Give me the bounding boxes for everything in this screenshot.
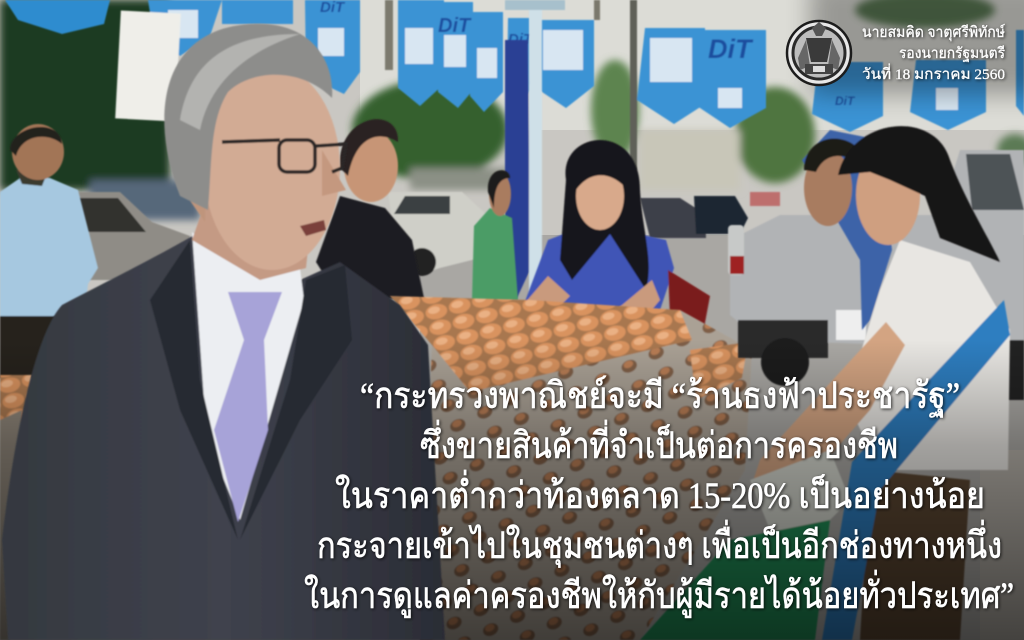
blue standing banner and pole	[505, 0, 565, 300]
white shirt collar	[192, 232, 304, 520]
lapels	[150, 240, 238, 540]
egg trays stack	[0, 296, 752, 640]
background cars	[60, 192, 780, 280]
purple tie	[214, 292, 282, 522]
top-right dim overlay	[810, 0, 1024, 95]
quote text block	[304, 375, 1014, 618]
blue DIT flag banners: DiT	[508, 31, 534, 48]
icon: government emblem seal	[787, 21, 851, 85]
grey hair	[164, 24, 332, 210]
person: background man at left	[0, 124, 98, 378]
person: vendor in blue shirt	[524, 140, 710, 328]
speaker name and date: วันที่ 18 มกราคม 2560	[862, 63, 1005, 83]
person: woman in black jacket	[316, 119, 424, 300]
dark suit	[2, 235, 445, 640]
quote text block: ซึ่งขายสินค้าที่จำเป็นต่อการครองชีพ	[420, 419, 898, 467]
pickup truck	[728, 150, 1024, 400]
person: woman in green	[472, 170, 518, 300]
foreground speaker: Somkid	[2, 24, 445, 640]
blue DIT flag banners: DiT	[438, 15, 472, 37]
dark gradient overlay behind quote	[0, 340, 1024, 640]
speaker name and date: รองนายกรัฐมนตรี	[899, 45, 1005, 62]
speaker name and date: นายสมคิด จาตุศรีพิทักษ์	[862, 24, 1005, 42]
blue DIT flag banners	[5, 0, 1024, 170]
person: vendor in white shirt with blue apron	[640, 126, 1010, 640]
glasses	[222, 140, 346, 172]
neck and face	[192, 200, 310, 280]
blue DIT flag banners: DiT	[835, 94, 856, 108]
blue DIT flag banners: DiT	[708, 34, 754, 64]
speaker name and date	[862, 24, 1005, 83]
